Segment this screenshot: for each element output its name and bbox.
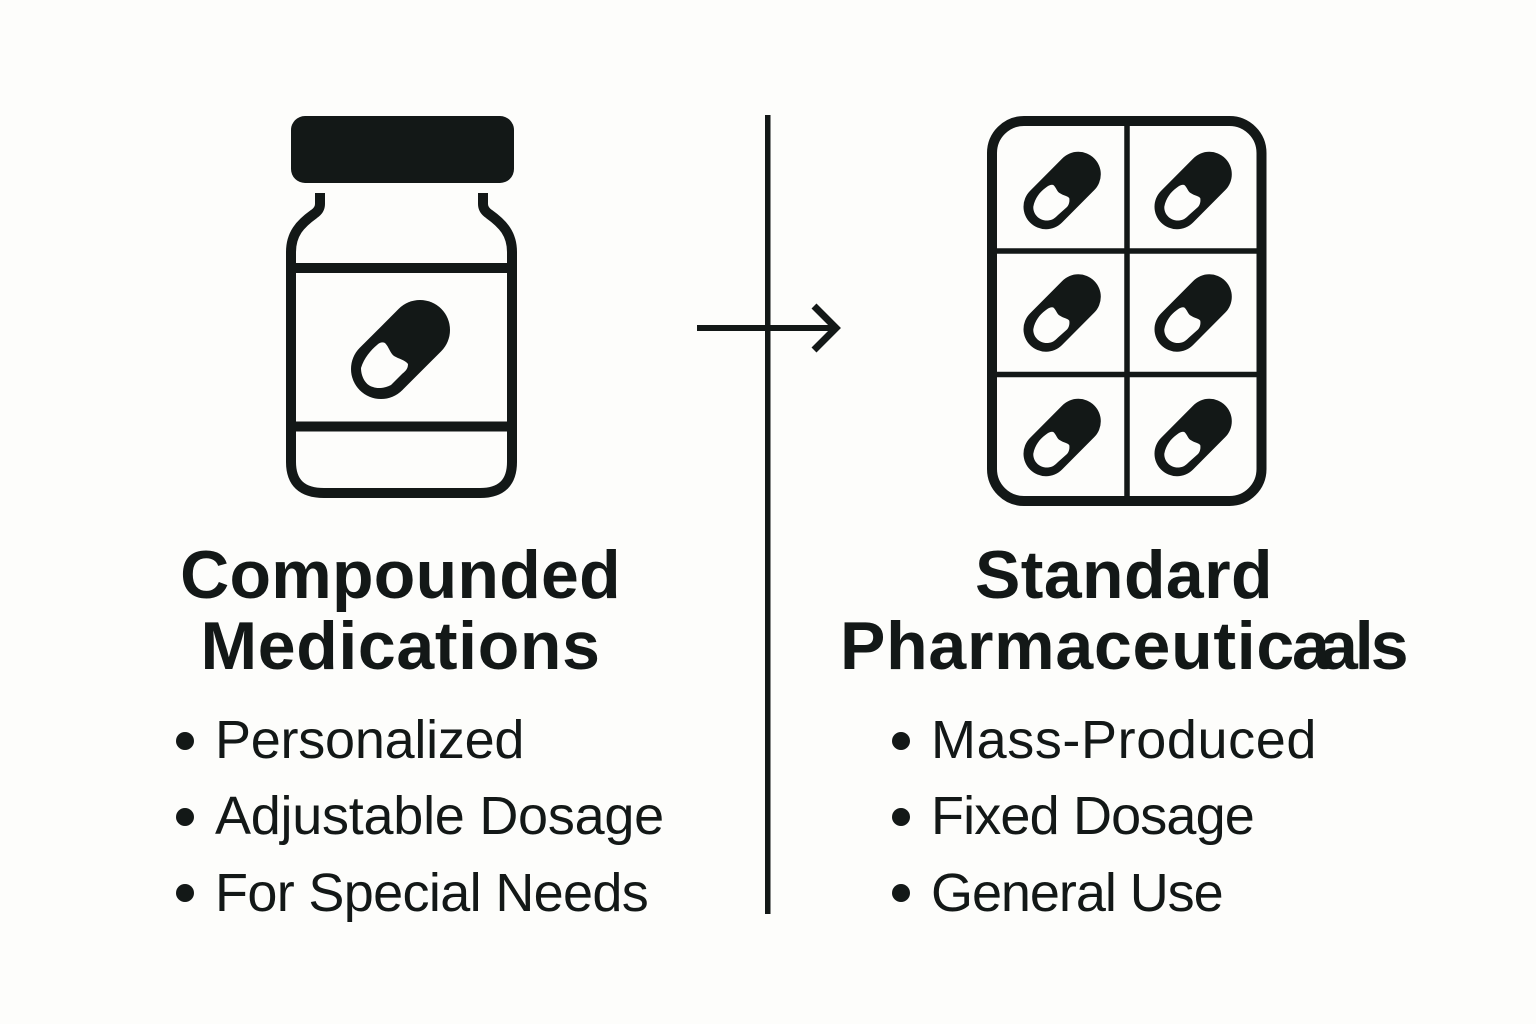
list: compounded features: Adjustable Dosage	[215, 786, 664, 846]
list: standard features: Fixed Dosage	[931, 786, 1254, 846]
capsule row 2 right	[1164, 297, 1209, 343]
heading: compounded medications	[180, 537, 621, 684]
arrow	[697, 306, 836, 350]
capsule row 2 left	[1033, 297, 1078, 343]
list: compounded features: Personalized	[215, 710, 524, 770]
heading: standard pharmaceuticals: Pharmaceutic als	[840, 608, 1406, 684]
heading: compounded medications: Medications	[200, 608, 601, 684]
divider line	[765, 115, 770, 914]
list: compounded features	[176, 710, 664, 922]
capsule row 1 left	[1033, 174, 1078, 221]
list: compounded features: For Special Needs	[215, 862, 648, 922]
heading: standard pharmaceuticals	[840, 537, 1406, 684]
capsule row 3 left	[1033, 421, 1078, 468]
capsule row 1 right	[1164, 174, 1209, 221]
heading: compounded medications: Compounded	[180, 537, 621, 613]
list: standard features	[892, 710, 1317, 922]
icon: capsule on label	[361, 330, 420, 388]
overlapping letter glitch: a	[1292, 608, 1330, 684]
heading: standard pharmaceuticals: Standard	[975, 537, 1273, 613]
list: standard features: Mass-Produced	[931, 710, 1317, 770]
capsule row 3 right	[1164, 421, 1209, 468]
icon: medicine bottle	[291, 116, 514, 493]
icon: blister pack	[992, 121, 1262, 501]
list: standard features: General Use	[931, 862, 1223, 922]
